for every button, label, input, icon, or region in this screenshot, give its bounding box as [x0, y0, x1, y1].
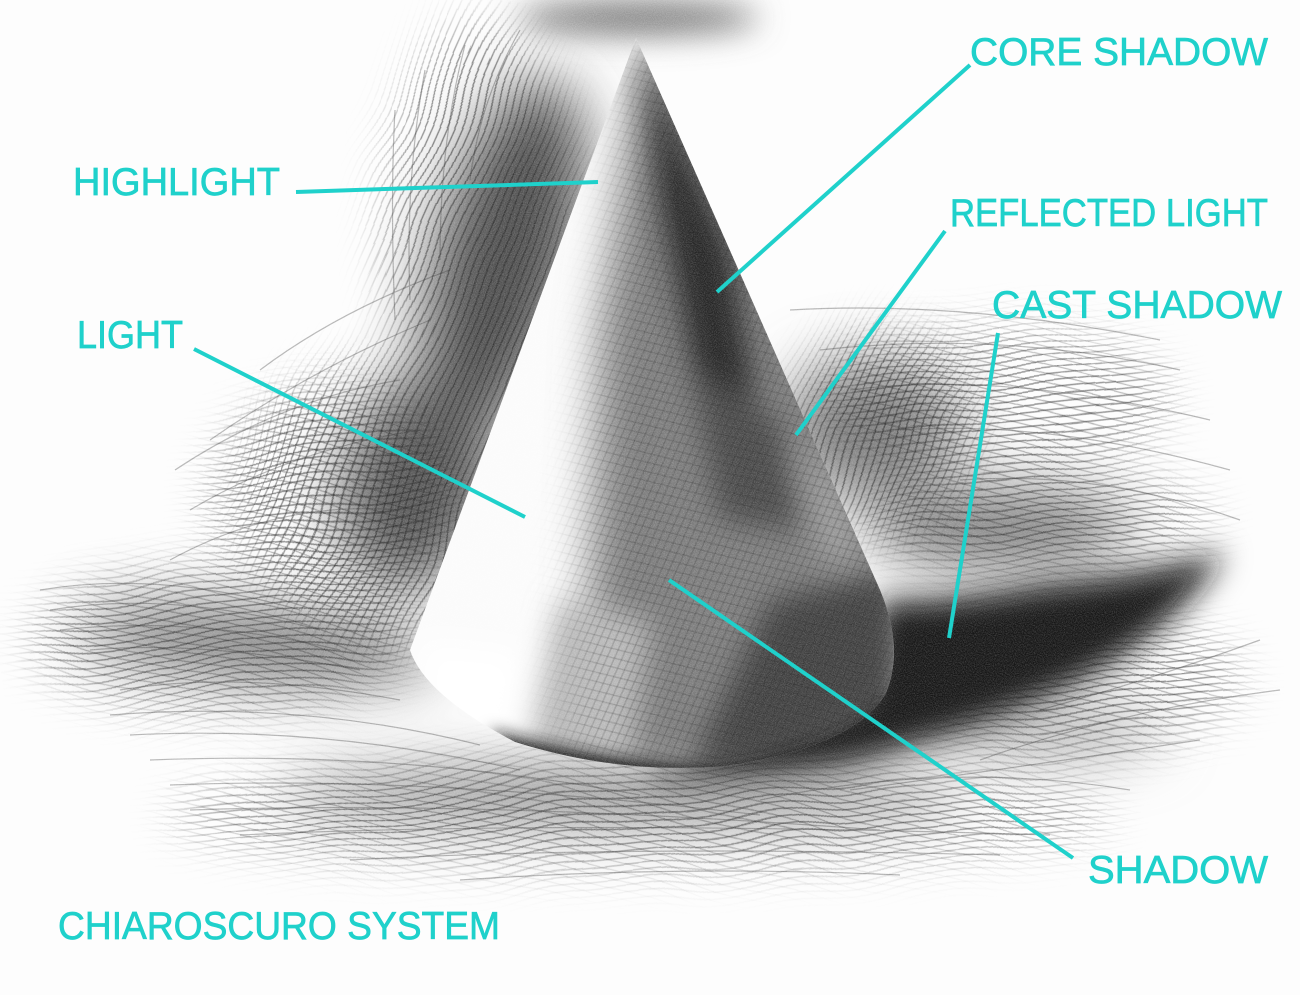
apex smudge [518, 2, 758, 34]
label: highlight [73, 161, 598, 204]
label: shadow: SHADOW [1088, 849, 1268, 892]
label: light [77, 314, 525, 517]
cone [405, 30, 910, 790]
label: shadow [669, 580, 1268, 892]
label: cast shadow [949, 284, 1282, 638]
label: reflected light [796, 192, 1268, 435]
label: reflected light: REFLECTED LIGHT [950, 192, 1268, 235]
cast shadow [640, 552, 1225, 778]
label: core shadow [717, 31, 1268, 292]
label: core shadow: CORE SHADOW [970, 31, 1268, 74]
label: cast shadow: CAST SHADOW [992, 284, 1282, 327]
title: CHIAROSCURO SYSTEM [58, 905, 500, 948]
label: highlight: HIGHLIGHT [73, 161, 280, 204]
label: light: LIGHT [77, 314, 183, 357]
